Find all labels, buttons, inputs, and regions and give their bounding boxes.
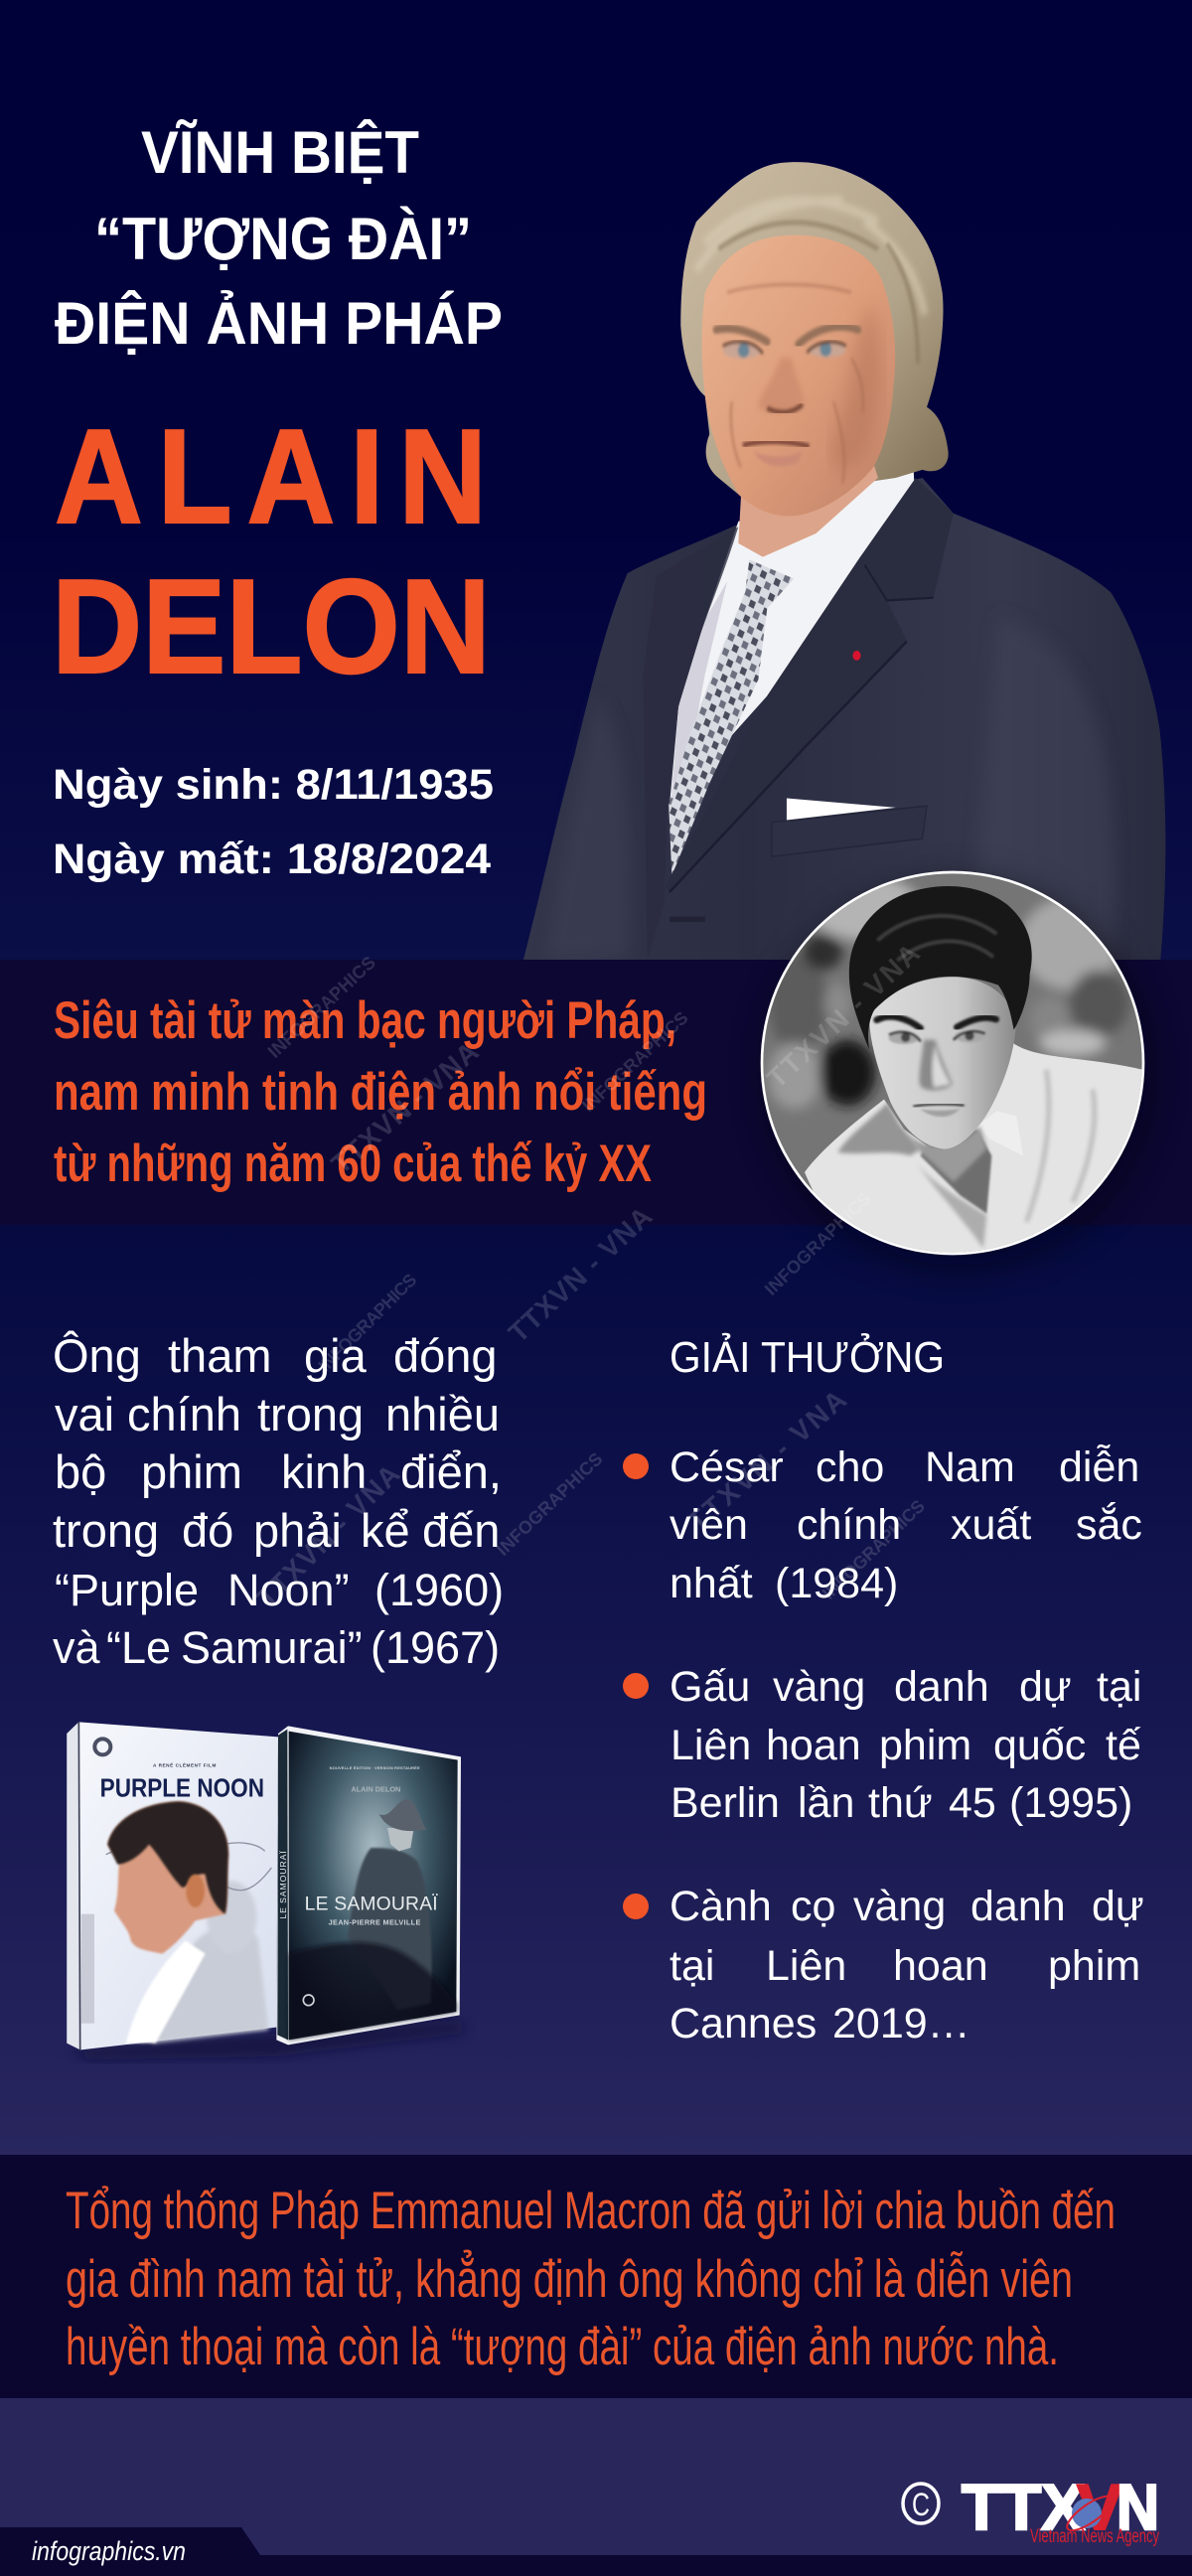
award 1 text: Nam <box>925 1443 1015 1491</box>
award 2 text: (1995) <box>1009 1779 1132 1827</box>
award 2 text: tại <box>1097 1663 1141 1711</box>
dvd: Purple Noon <box>67 1722 278 2049</box>
award 1 text: diễn <box>1059 1443 1139 1491</box>
award 2 text <box>670 1663 1141 1827</box>
award 2 <box>623 1663 1141 1827</box>
award 3 text: cọ <box>791 1883 835 1930</box>
dvd: Le Samourai <box>276 1726 461 2045</box>
line 6: (1967) <box>371 1622 500 1673</box>
website label: infographics.vn <box>32 2536 186 2566</box>
line 3: kinh <box>281 1445 367 1498</box>
award 3 text: phim <box>1048 1942 1140 1990</box>
bullet <box>623 1673 649 1699</box>
breast pocket <box>772 806 927 856</box>
suit jacket <box>523 478 1165 960</box>
award 3 text: 2019… <box>832 2000 970 2047</box>
award 1 text <box>670 1443 1142 1607</box>
bullet <box>623 1894 649 1919</box>
eyebrows <box>716 327 858 345</box>
dates <box>53 761 494 883</box>
pocket square <box>787 799 896 820</box>
ALAIN: ALAIN <box>55 402 487 551</box>
award 2 text: lần <box>798 1779 854 1827</box>
open collar <box>921 1130 991 1214</box>
award 3 text: Liên <box>766 1942 846 1990</box>
line 4: phải <box>253 1504 342 1557</box>
eyes <box>723 342 846 359</box>
photo frame <box>761 871 1144 1255</box>
line 6: Samurai” <box>181 1622 363 1673</box>
nose <box>920 1040 953 1091</box>
awards heading: GIẢI THƯỞNG <box>670 1331 945 1382</box>
eyes <box>889 1030 985 1044</box>
line 3: phim <box>141 1445 242 1498</box>
line 3: bộ <box>55 1445 106 1498</box>
photo: Alain Delon portrait in suit <box>523 162 1165 960</box>
hair <box>849 886 1032 1050</box>
line 5: (1960) <box>374 1565 504 1615</box>
hair back <box>680 162 949 500</box>
spine title: LE SAMOURAÏ <box>278 1851 288 1919</box>
logo: TTXVN <box>903 2471 1159 2547</box>
watermarks: TTXVN - VNA <box>682 1384 852 1538</box>
edition line: NOUVELLE ÉDITION · VERSION RESTAURÉE <box>330 1765 420 1770</box>
dvd shadow <box>70 2020 464 2059</box>
letter N: N <box>1117 2471 1159 2543</box>
award 1 text: cho <box>816 1443 884 1491</box>
copyright symbol: C <box>912 2487 930 2522</box>
name: ALAIN DELON <box>52 402 491 701</box>
band background <box>0 960 1192 1225</box>
line 2: trong <box>257 1388 364 1440</box>
copyright symbol <box>903 2484 939 2523</box>
director credit: JEAN-PIERRE MELVILLE <box>329 1917 420 1926</box>
subtitle line 1: Siêu tài tử màn bạc người Pháp, <box>54 991 676 1050</box>
line 4: đó <box>182 1504 233 1557</box>
award 3 text <box>670 1883 1144 2047</box>
neck shadow <box>901 1126 986 1182</box>
award 2 text: danh <box>894 1663 989 1711</box>
subtitle line 3: từ những năm 60 của thế kỷ XX <box>54 1135 652 1193</box>
line 2: nhiều <box>385 1388 500 1440</box>
title line 1: VĨNH BIỆT <box>141 119 419 186</box>
award 1 text: César <box>670 1443 784 1491</box>
mouth <box>743 442 810 446</box>
watermark marks: INFOGRAPHICS <box>264 953 379 1062</box>
face shading <box>831 304 882 471</box>
line 1: đóng <box>393 1329 498 1382</box>
watermarks: INFOGRAPHICS <box>493 1448 606 1560</box>
title block <box>55 119 503 357</box>
photo: young Alain Delon in circle <box>755 864 1152 1262</box>
wrinkles <box>727 284 863 484</box>
line 5: “Purple <box>55 1565 199 1615</box>
face <box>701 235 895 516</box>
neck <box>738 456 878 557</box>
award 1 text: xuất <box>951 1501 1031 1549</box>
line 3: điển, <box>400 1445 502 1498</box>
background: middle section <box>0 1224 1192 2158</box>
award 2 text: Liên <box>670 1722 751 1769</box>
award 1 text: viên <box>670 1501 748 1549</box>
award 3 text: dự <box>1092 1883 1144 1930</box>
signature scribble <box>106 1843 271 1891</box>
award 2 text: phim <box>879 1722 971 1769</box>
left lapel <box>643 527 738 960</box>
award 1 text: sắc <box>1076 1501 1142 1549</box>
award 2 text: 45 <box>949 1779 996 1827</box>
line 5: Noon” <box>227 1565 350 1615</box>
watermarks: TTXVN - VNA <box>503 1201 658 1348</box>
right lapel <box>666 478 954 892</box>
watermarks: INFOGRAPHICS <box>578 1007 692 1116</box>
line 1: tham <box>168 1329 272 1382</box>
film title: PURPLE NOON <box>100 1772 264 1802</box>
birth date: Ngày sinh: 8/11/1935 <box>53 761 494 809</box>
award 3 text: danh <box>970 1883 1066 1930</box>
hair strands <box>696 200 925 314</box>
text: career paragraph <box>53 1329 504 1673</box>
footer <box>0 2471 1192 2576</box>
watermarks <box>250 938 929 1613</box>
small logo <box>303 1995 314 2006</box>
circle shadow <box>767 881 1150 1265</box>
line 2: chính <box>127 1388 241 1440</box>
award 2 text: vàng <box>773 1663 865 1711</box>
award 2 text: Gấu <box>670 1663 750 1711</box>
band: headline subtitle <box>0 960 1192 1225</box>
line 4: kể <box>361 1504 410 1557</box>
watermarks: INFOGRAPHICS <box>761 1188 874 1299</box>
photo content <box>755 864 1152 1262</box>
eyebrows <box>877 1016 996 1028</box>
line 2: vai <box>55 1388 114 1440</box>
background: footer section <box>0 2396 1192 2576</box>
letters TTX: TTX <box>962 2471 1085 2543</box>
nose <box>758 358 805 413</box>
watermarks: INFOGRAPHICS <box>315 1270 420 1376</box>
watermarks: INFOGRAPHICS <box>819 1496 929 1603</box>
award 1 text: nhất <box>670 1560 753 1607</box>
line 4: đến <box>422 1504 500 1557</box>
film credit: A RENÉ CLÉMENT FILM <box>153 1760 216 1767</box>
button row <box>670 917 705 922</box>
line 6: “Le <box>106 1622 171 1673</box>
award 3 text: vàng <box>853 1883 946 1930</box>
watermarks: TTXVN - VNA <box>250 1458 406 1613</box>
footer bar <box>0 2527 1192 2576</box>
bullet <box>623 1453 649 1479</box>
award 2 text: dự <box>1019 1663 1072 1711</box>
background: top section <box>0 0 1192 962</box>
title line 3: ĐIỆN ẢNH PHÁP <box>55 290 503 357</box>
award 3 text: Cannes <box>670 2000 817 2047</box>
award 2 text: Berlin <box>670 1779 780 1827</box>
shirt <box>670 468 915 805</box>
subtitle line 2: nam minh tinh điện ảnh nổi tiếng <box>54 1063 707 1122</box>
watermarks: TTXVN - VNA <box>761 938 926 1094</box>
necktie <box>669 559 794 875</box>
award 3 text: hoan <box>893 1942 988 1990</box>
DELON: DELON <box>52 551 491 701</box>
film title: LE SAMOURAÏ <box>305 1894 438 1915</box>
line 1: gia <box>304 1329 368 1382</box>
shirt <box>805 1043 1149 1262</box>
award 1 text: (1984) <box>775 1560 898 1607</box>
actor profile <box>107 1801 228 1954</box>
line 4: trong <box>53 1504 159 1557</box>
award 2 text: quốc <box>993 1722 1086 1769</box>
line 6: và <box>53 1622 101 1673</box>
dvd covers <box>67 1722 464 2059</box>
face <box>869 977 1016 1149</box>
Criterion logo <box>94 1739 110 1754</box>
letter V: V <box>1077 2471 1122 2543</box>
award 2 text: tế <box>1106 1722 1141 1769</box>
watermarks: TTXVN - VNA <box>326 1036 485 1180</box>
awards list <box>623 1331 1144 2047</box>
death date: Ngày mất: 18/8/2024 <box>53 835 491 883</box>
band: Macron quote <box>0 2155 1192 2398</box>
award 3 text: Cành <box>670 1883 772 1930</box>
mouth <box>913 1104 965 1107</box>
line 1: Ông <box>53 1329 141 1382</box>
title line 2: “TƯỢNG ĐÀI” <box>94 206 472 272</box>
quote background <box>0 2155 1192 2398</box>
award 2 text: thứ <box>868 1779 933 1827</box>
award 3 <box>623 1883 1144 2047</box>
award 3 text: tại <box>670 1942 714 1990</box>
award 2 text: hoan <box>766 1722 861 1769</box>
lapel pin <box>852 651 860 661</box>
award 1 <box>623 1443 1142 1607</box>
globe icon <box>1063 2491 1117 2536</box>
award 1 text: chính <box>797 1501 901 1549</box>
actor credit: ALAIN DELON <box>351 1784 400 1793</box>
